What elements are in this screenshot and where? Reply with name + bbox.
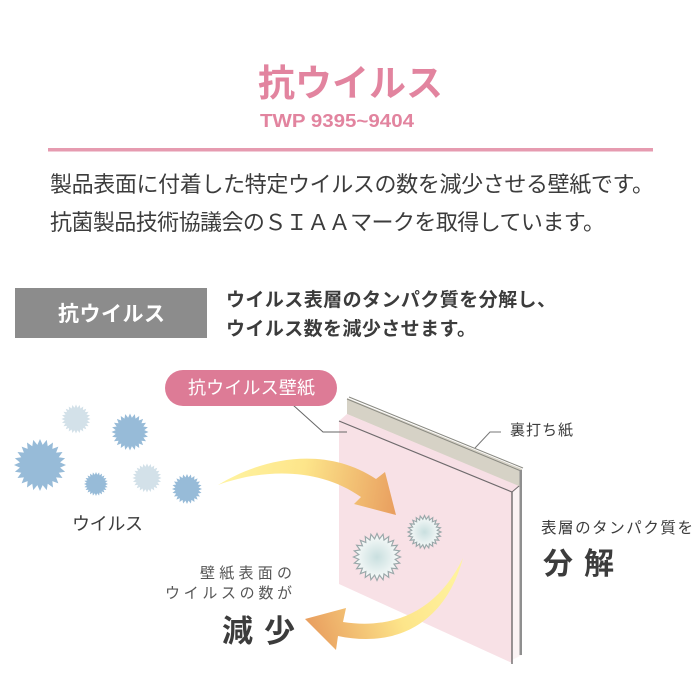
icon: large virus — [14, 439, 66, 491]
wallpaper diagram — [339, 397, 523, 664]
description text — [50, 172, 654, 235]
label: decompose: 分解 — [543, 548, 614, 581]
product code: TWP 9395~9404 — [260, 110, 415, 131]
icon: light virus bottom — [132, 464, 162, 492]
callout pill: anti-virus wallpaper — [165, 370, 337, 406]
leader: backing paper — [475, 432, 501, 448]
description text: 抗菌製品技術協議会のＳＩＡＡマークを取得しています。 — [50, 210, 605, 235]
explanation text: ウイルス数を減少させます。 — [226, 317, 476, 340]
label: backing paper: 裏打ち紙 — [510, 422, 573, 439]
description text: 製品表面に付着した特定ウイルスの数を減少させる壁紙です。 — [50, 172, 654, 197]
label: decrease: 減少 — [222, 614, 295, 649]
label: virus: ウイルス — [72, 514, 143, 534]
callout pill: anti-virus wallpaper: 抗ウイルス壁紙 — [188, 378, 315, 398]
icon: medium virus — [112, 414, 148, 450]
backing paper layer — [339, 397, 523, 660]
title: 抗ウイルス — [258, 63, 443, 104]
label: wallpaper surface virus count: 壁紙表面の — [200, 565, 292, 582]
label: wallpaper surface virus count: ウイルスの数が — [165, 585, 292, 602]
label box: anti-virus — [15, 288, 207, 338]
icon: right virus — [172, 474, 202, 504]
virus icons — [14, 404, 202, 504]
arrow: virus into wallpaper — [218, 459, 396, 515]
label: surface protein: 表層のタンパク質を — [541, 519, 693, 537]
label box: anti-virus: 抗ウイルス — [58, 303, 165, 326]
label: wallpaper surface virus count — [165, 565, 292, 602]
surface edge lines — [339, 421, 519, 664]
leader: wallpaper to pill — [293, 405, 347, 432]
icon: light virus top — [62, 404, 90, 434]
icon: deactivated virus, large — [354, 534, 400, 580]
wallpaper surface layer — [339, 421, 512, 663]
arrow: reduced virus count — [305, 558, 463, 650]
icon: small virus — [84, 472, 108, 496]
explanation text — [226, 289, 556, 340]
icon: deactivated virus, small — [408, 516, 441, 548]
title rule — [48, 148, 653, 152]
explanation text: ウイルス表層のタンパク質を分解し、 — [226, 289, 556, 311]
